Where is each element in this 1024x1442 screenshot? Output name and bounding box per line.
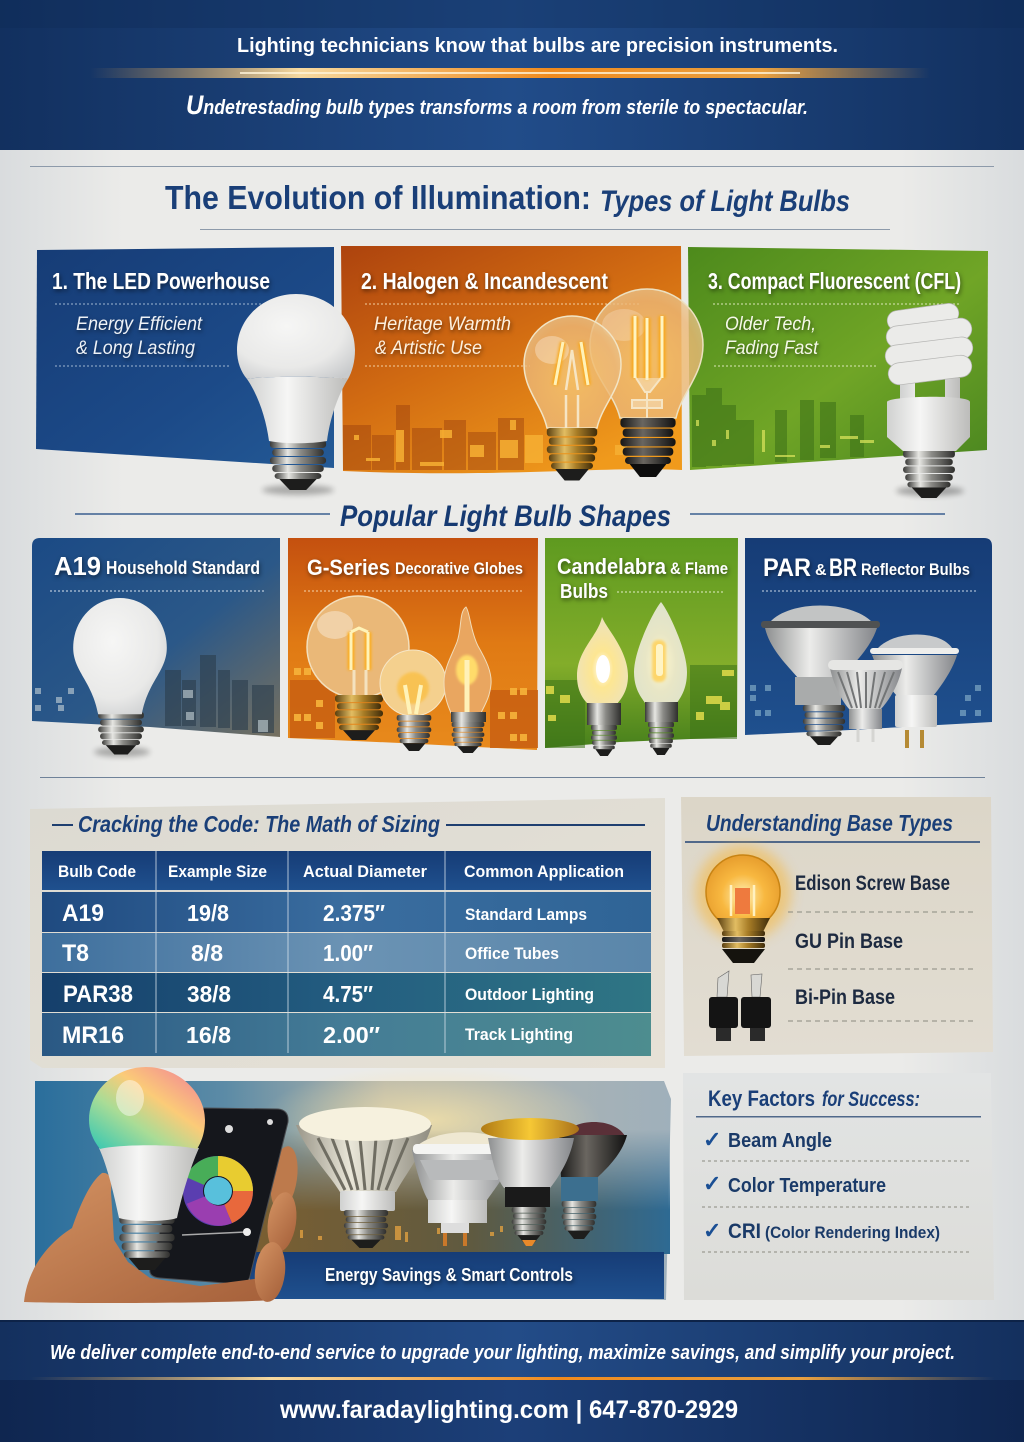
sizing table: 19/8 — [187, 900, 229, 926]
panel: key factors: Key Factors — [708, 1086, 815, 1111]
sizing table: T8 — [62, 940, 89, 967]
icon: smartphone with colour wheel — [150, 1108, 288, 1284]
panel: key factors: for Success: — [822, 1088, 920, 1111]
main title — [30, 166, 994, 230]
panel: cracking the code — [30, 798, 665, 1068]
panel: compact fluorescent: Fading Fast — [725, 338, 819, 359]
checklist item: beam angle — [703, 1127, 832, 1152]
icon: PAR reflector bulb — [761, 606, 880, 745]
icon: clear halogen bulb back — [590, 289, 703, 477]
icon: gold reflector bulb — [481, 1118, 579, 1246]
panel: cracking the code: Cracking the Code: The Math of Sizing — [78, 811, 440, 837]
main title: Types of Light Bulbs — [600, 185, 850, 218]
checklist item: CRI: ✓ — [703, 1218, 721, 1243]
panel: candelabra and flame: & Flame — [670, 559, 728, 578]
sizing table: 1.00″ — [323, 940, 373, 966]
sizing table: 38/8 — [187, 981, 231, 1007]
header line two: Undetrestading bulb types transforms a room from sterile to spectacular. — [186, 90, 808, 120]
sizing table: Example Size — [168, 862, 267, 881]
icon: clear incandescent bulb front — [524, 316, 621, 480]
sizing table: Actual Diameter — [303, 862, 427, 881]
panel: candelabra and flame: Candelabra — [557, 554, 667, 579]
panel: candelabra and flame — [545, 538, 738, 756]
sizing table: 2.375″ — [323, 900, 385, 926]
panel: candelabra and flame: Bulbs — [560, 581, 608, 603]
icon: LED bulb — [237, 294, 355, 495]
icon: hand back finger — [267, 1145, 301, 1211]
header banner — [0, 0, 1024, 150]
panel: key factors — [683, 1073, 994, 1300]
icon: dark reflector bulb — [559, 1122, 627, 1239]
sizing table: 4.75″ — [323, 981, 373, 1007]
panel: understanding base types: GU Pin Base — [795, 930, 903, 953]
caption bar: Energy Savings & Smart Controls — [325, 1265, 573, 1285]
checklist item: colour temperature: Color Temperature — [728, 1175, 886, 1197]
icon: white GU bulb — [412, 1132, 515, 1246]
icon: ribbed reflector bulb — [296, 1107, 432, 1248]
icon: CFL spiral bulb — [884, 302, 974, 498]
panel: halogen and incandescent: Heritage Warmth — [374, 314, 511, 335]
panel: halogen and incandescent — [341, 246, 703, 480]
panel: LED powerhouse: 1. The LED Powerhouse — [52, 268, 270, 294]
sizing table: Standard Lamps — [465, 905, 587, 924]
panel: LED powerhouse: & Long Lasting — [76, 338, 195, 359]
panel: PAR and BR: & — [815, 562, 827, 579]
panel: G-series: Decorative Globes — [395, 559, 523, 578]
sizing table: A19 — [62, 900, 104, 927]
icon: BR reflector bulb — [870, 634, 959, 748]
caption bar — [250, 1252, 664, 1299]
icon: candle bulb left — [577, 617, 628, 756]
panel: A19: A19 — [54, 551, 101, 581]
icon: colour smart bulb — [89, 1067, 205, 1270]
sizing table — [42, 851, 651, 1056]
panel: PAR and BR: Reflector Bulbs — [861, 560, 970, 579]
checklist item: colour temperature — [703, 1171, 886, 1197]
sizing table: Common Application — [464, 862, 624, 881]
heading: popular shapes: Popular Light Bulb Shapes — [340, 500, 671, 533]
sizing table: Office Tubes — [465, 944, 559, 963]
panel: A19: Household Standard — [106, 558, 260, 578]
sizing table: 2.00″ — [323, 1022, 380, 1048]
panel: G-series — [288, 538, 538, 753]
panel: halogen and incandescent: 2. Halogen & Incandescent — [361, 268, 608, 294]
sizing table: Track Lighting — [465, 1025, 573, 1044]
icon: candle bulb right — [634, 602, 687, 755]
checklist item: colour temperature: ✓ — [703, 1171, 721, 1196]
panel: LED powerhouse — [36, 247, 355, 495]
panel: A19 — [32, 538, 280, 757]
sizing table: 16/8 — [186, 1022, 231, 1048]
sizing table: 8/8 — [191, 940, 223, 966]
panel: PAR and BR — [745, 538, 992, 748]
checklist item: beam angle: ✓ — [703, 1127, 721, 1152]
main title: The Evolution of Illumination: — [165, 179, 591, 216]
icon: A19 bulb — [73, 598, 167, 757]
sizing table: Outdoor Lighting — [465, 985, 594, 1004]
panel: smart controls — [24, 1065, 671, 1303]
panel: G-series: G-Series — [307, 555, 390, 580]
header line one: Lighting technicians know that bulbs are precision instruments. — [237, 35, 838, 57]
checklist item: CRI: CRI — [728, 1220, 761, 1243]
footer banner — [0, 1320, 1024, 1442]
icon: flame tip bulb — [444, 607, 491, 753]
panel: halogen and incandescent: & Artistic Use — [375, 338, 482, 359]
sizing table: PAR38 — [63, 981, 133, 1008]
panel: compact fluorescent — [688, 247, 988, 498]
checklist item: CRI — [703, 1218, 940, 1243]
footer contact: www.faradaylighting.com | 647-870-2929 — [279, 1396, 738, 1424]
sizing table: MR16 — [62, 1022, 124, 1049]
panel: compact fluorescent: Older Tech, — [725, 314, 816, 335]
panel: PAR and BR: PAR — [763, 554, 811, 582]
panel: PAR and BR: BR — [829, 554, 857, 582]
icon: bi-pin base — [709, 971, 771, 1041]
icon: MR spot bulb — [828, 660, 903, 742]
sizing table: Bulb Code — [58, 862, 136, 881]
panel: LED powerhouse: Energy Efficient — [76, 314, 203, 335]
icon: small globe bulb — [380, 650, 446, 751]
icon: Edison screw bulb — [695, 845, 791, 963]
divider rule — [40, 777, 985, 778]
checklist item: CRI: (Color Rendering Index) — [765, 1223, 940, 1242]
panel: understanding base types: Bi-Pin Base — [795, 986, 895, 1009]
panel: understanding base types: Edison Screw Base — [795, 872, 950, 895]
icon: large globe bulb — [307, 596, 409, 740]
checklist item: beam angle: Beam Angle — [728, 1130, 832, 1152]
panel: understanding base types — [681, 797, 993, 1056]
icon: hand — [24, 1173, 300, 1303]
panel: understanding base types: Understanding Base Types — [706, 810, 953, 836]
